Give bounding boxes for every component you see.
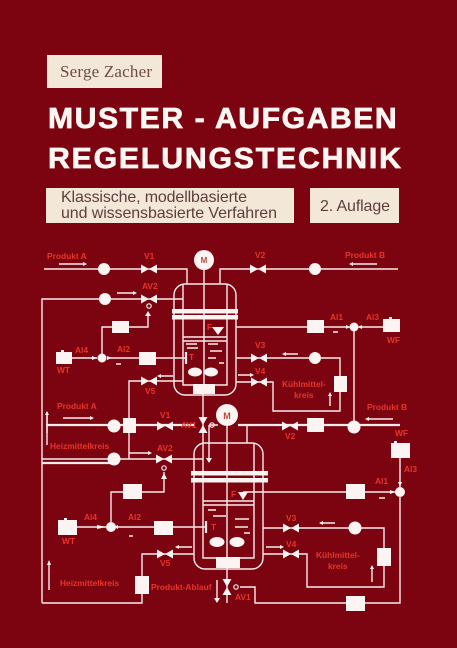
diagram labels: V5	[160, 558, 171, 568]
diagram labels: WF	[387, 335, 400, 345]
upper motor: M	[201, 256, 208, 265]
title	[48, 103, 401, 175]
diagram labels: Produkt-Ablauf	[151, 582, 212, 592]
author box	[47, 55, 162, 88]
diagram labels: WF	[395, 428, 408, 438]
diagram labels: Al1	[330, 312, 343, 322]
lower motor	[216, 404, 238, 557]
diagram labels: Heizmittelkreis	[60, 578, 119, 588]
diagram labels: V1	[160, 410, 171, 420]
diagram labels: V2	[285, 431, 296, 441]
author box: Serge Zacher	[60, 62, 152, 81]
diagram labels: Al3	[404, 464, 417, 474]
diagram labels: kreis	[328, 561, 348, 571]
process diagram	[42, 250, 417, 611]
diagram labels: T	[211, 522, 217, 532]
lower reactor vessel	[191, 443, 268, 569]
diagram labels: V5	[145, 386, 156, 396]
diagram labels: V1	[144, 251, 155, 261]
diagram labels: AV2	[142, 281, 158, 291]
title: MUSTER - AUFGABEN	[48, 103, 397, 135]
diagram labels: Al4	[84, 512, 97, 522]
lower junctions and blocks	[58, 418, 410, 611]
subtitle box	[46, 188, 294, 223]
lower motor: M	[223, 411, 231, 421]
diagram labels: Produkt B	[345, 250, 385, 260]
edition box	[310, 188, 399, 223]
subtitle box: Klassische, modellbasierte	[61, 189, 247, 206]
diagram labels: AV1	[181, 420, 197, 430]
diagram labels: T	[189, 352, 195, 362]
diagram labels: Al4	[75, 345, 88, 355]
upper motor	[194, 250, 214, 384]
upper junctions and blocks	[56, 263, 400, 392]
subtitle box: und wissensbasierte Verfahren	[61, 205, 277, 222]
diagram labels	[47, 250, 417, 602]
diagram labels: Kühlmittel-	[282, 379, 326, 389]
edition box: 2. Auflage	[320, 198, 390, 215]
diagram labels: Al1	[375, 476, 388, 486]
diagram labels: AV1	[235, 592, 251, 602]
flow arrows	[45, 262, 393, 455]
lower flow arrows	[47, 325, 402, 603]
diagram labels: Heizmittelkreis	[50, 441, 109, 451]
diagram labels: WT	[62, 536, 76, 546]
diagram labels: V4	[286, 539, 297, 549]
diagram labels: Al2	[128, 512, 141, 522]
diagram labels: Al3	[366, 312, 379, 322]
diagram labels: Produkt A	[57, 401, 97, 411]
upper reactor vessel	[172, 284, 238, 395]
diagram labels: WT	[57, 365, 71, 375]
diagram labels: V2	[255, 250, 266, 260]
lower pipes	[42, 394, 400, 603]
diagram labels: V4	[255, 366, 266, 376]
diagram labels: V3	[286, 513, 297, 523]
diagram labels: Produkt B	[367, 402, 407, 412]
title: REGELUNGSTECHNIK	[48, 143, 401, 175]
diagram labels: V3	[255, 340, 266, 350]
diagram labels: AV2	[157, 443, 173, 453]
diagram labels: kreis	[294, 390, 314, 400]
diagram labels: Kühlmittel-	[316, 550, 360, 560]
diagram labels: Produkt A	[47, 251, 87, 261]
diagram labels: Al2	[117, 344, 130, 354]
lower valves	[156, 417, 299, 595]
diagram labels: F	[207, 322, 212, 332]
upper pipes	[42, 269, 398, 603]
upper valves	[141, 264, 267, 386]
diagram labels: F	[231, 489, 236, 499]
